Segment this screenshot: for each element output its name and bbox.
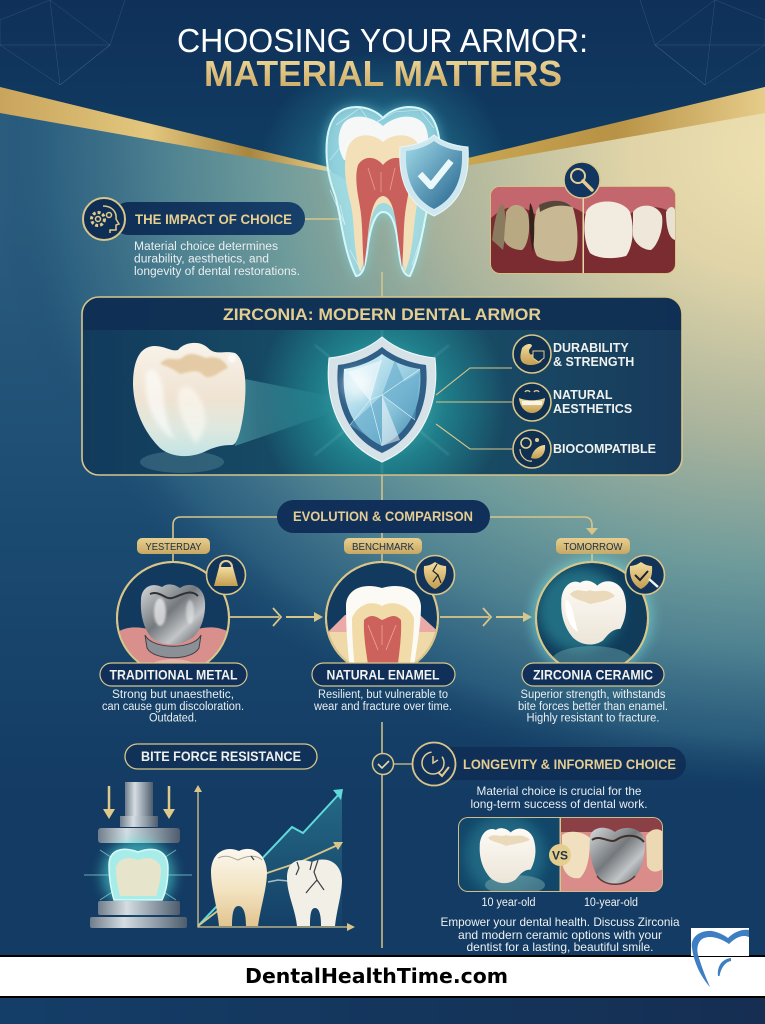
column: natural enamel <box>312 538 455 713</box>
pill heading <box>112 202 305 235</box>
heading <box>425 747 686 780</box>
panel: longevity and informed choice <box>412 742 686 954</box>
connectors <box>436 368 512 449</box>
title: CHOOSING YOUR ARMOR: <box>177 22 588 59</box>
icon: check shield <box>400 135 468 216</box>
column: traditional metal <box>100 538 247 724</box>
photo captions: 10 year-old <box>482 897 536 909</box>
photo captions <box>482 897 638 909</box>
tag: benchmark <box>344 538 422 554</box>
label: TRADITIONAL METAL <box>110 666 238 682</box>
feature: biocompatible: BIOCOMPATIBLE <box>553 442 656 456</box>
panel: zirconia modern dental armor <box>81 296 683 476</box>
label <box>100 663 247 686</box>
illustration: zirconia crown <box>532 558 652 678</box>
photo captions: 10-year-old <box>584 897 638 909</box>
description: Material choice is crucial for the <box>476 784 642 798</box>
comparison photo <box>458 815 664 895</box>
gold ribbons <box>0 87 765 172</box>
description: Outdated. <box>149 712 197 724</box>
feature: durability and strength <box>513 335 634 373</box>
column: zirconia ceramic <box>518 538 668 724</box>
icon: magnifier <box>564 162 600 198</box>
description: longevity of dental restorations. <box>134 266 300 278</box>
vs badge <box>549 844 571 866</box>
diamond shield <box>268 330 497 474</box>
feature: natural aesthetics: AESTHETICS <box>553 402 632 416</box>
call to action <box>440 915 680 954</box>
tag: yesterday: YESTERDAY <box>146 542 202 553</box>
panel: the impact of choice <box>83 198 305 278</box>
call to action: and modern ceramic options with your <box>458 928 662 942</box>
description: can cause gum discoloration. <box>102 701 244 713</box>
description: bite forces better than enamel. <box>518 701 668 713</box>
icon: weight <box>206 556 246 594</box>
feature: biocompatible <box>513 430 656 468</box>
icon: shield check with cursor <box>626 556 664 594</box>
description: Highly resistant to fracture. <box>526 712 660 724</box>
icon: clock <box>412 742 456 786</box>
label: ZIRCONIA CERAMIC <box>533 666 653 682</box>
label: NATURAL ENAMEL <box>326 666 440 682</box>
description: Material choice determines <box>134 241 278 253</box>
panel heading: ZIRCONIA: MODERN DENTAL ARMOR <box>223 305 541 324</box>
flow arrow: yesterday to benchmark <box>230 608 323 626</box>
description <box>470 784 648 811</box>
panel frame <box>82 297 682 475</box>
tag: tomorrow: TOMORROW <box>564 542 623 553</box>
panel: bite force resistance <box>84 744 355 931</box>
flow arrow: benchmark to tomorrow <box>440 608 532 626</box>
light beam <box>235 378 330 446</box>
feature: durability and strength: & STRENGTH <box>553 355 634 369</box>
description: wear and fracture over time. <box>313 701 452 713</box>
evolution and comparison flow lines <box>173 517 592 563</box>
call to action: Empower your dental health. Discuss Zirconia <box>440 915 680 929</box>
description: durability, aesthetics, and <box>134 254 269 266</box>
description <box>102 689 244 724</box>
before and after teeth photo <box>490 162 676 274</box>
heading: evolution and comparison: EVOLUTION & COMPARISON <box>293 509 473 524</box>
description: Superior strength, withstands <box>520 689 666 701</box>
logo: blue tooth <box>691 928 749 987</box>
illustration: enamel cross section <box>325 561 439 662</box>
description <box>134 241 300 278</box>
arrowhead: to tomorrow <box>586 528 598 535</box>
icon: gear head <box>83 198 125 240</box>
label <box>312 663 455 686</box>
feature: durability and strength: DURABILITY <box>553 341 629 355</box>
pill heading: THE IMPACT OF CHOICE <box>135 211 292 227</box>
feature: natural aesthetics <box>513 383 632 421</box>
chart: force line graph <box>194 785 355 931</box>
footer <box>0 955 765 1024</box>
heading: LONGEVITY & INFORMED CHOICE <box>463 756 676 772</box>
heading: evolution and comparison <box>277 500 490 533</box>
icon: cracked shield <box>416 556 454 594</box>
vs badge: VS <box>552 848 568 862</box>
heading <box>125 744 317 769</box>
title: MATERIAL MATTERS <box>204 53 562 94</box>
tag: benchmark: BENCHMARK <box>352 542 414 553</box>
footer: DentalHealthTime.com <box>245 964 508 988</box>
call to action: dentist for a lasting, beautiful smile. <box>466 940 654 954</box>
tag: tomorrow <box>556 538 630 554</box>
description <box>518 689 668 724</box>
description <box>313 689 452 713</box>
title <box>177 22 588 94</box>
cracked tooth <box>287 859 342 926</box>
heading: BITE FORCE RESISTANCE <box>141 749 301 764</box>
icon: timeline check node <box>372 754 413 774</box>
zirconia crown <box>133 343 245 473</box>
healthy tooth <box>211 849 267 926</box>
description: Resilient, but vulnerable to <box>318 689 448 701</box>
feature: natural aesthetics: NATURAL <box>553 388 613 402</box>
bite press <box>84 782 192 928</box>
description: long-term success of dental work. <box>470 797 648 811</box>
label <box>522 663 664 686</box>
description: Strong but unaesthetic, <box>112 689 234 701</box>
icon: anatomical tooth with shield <box>326 107 468 276</box>
header band <box>0 0 765 200</box>
connector lines <box>305 219 382 948</box>
tag: yesterday <box>137 538 210 554</box>
illustration: metal crown <box>116 561 230 662</box>
